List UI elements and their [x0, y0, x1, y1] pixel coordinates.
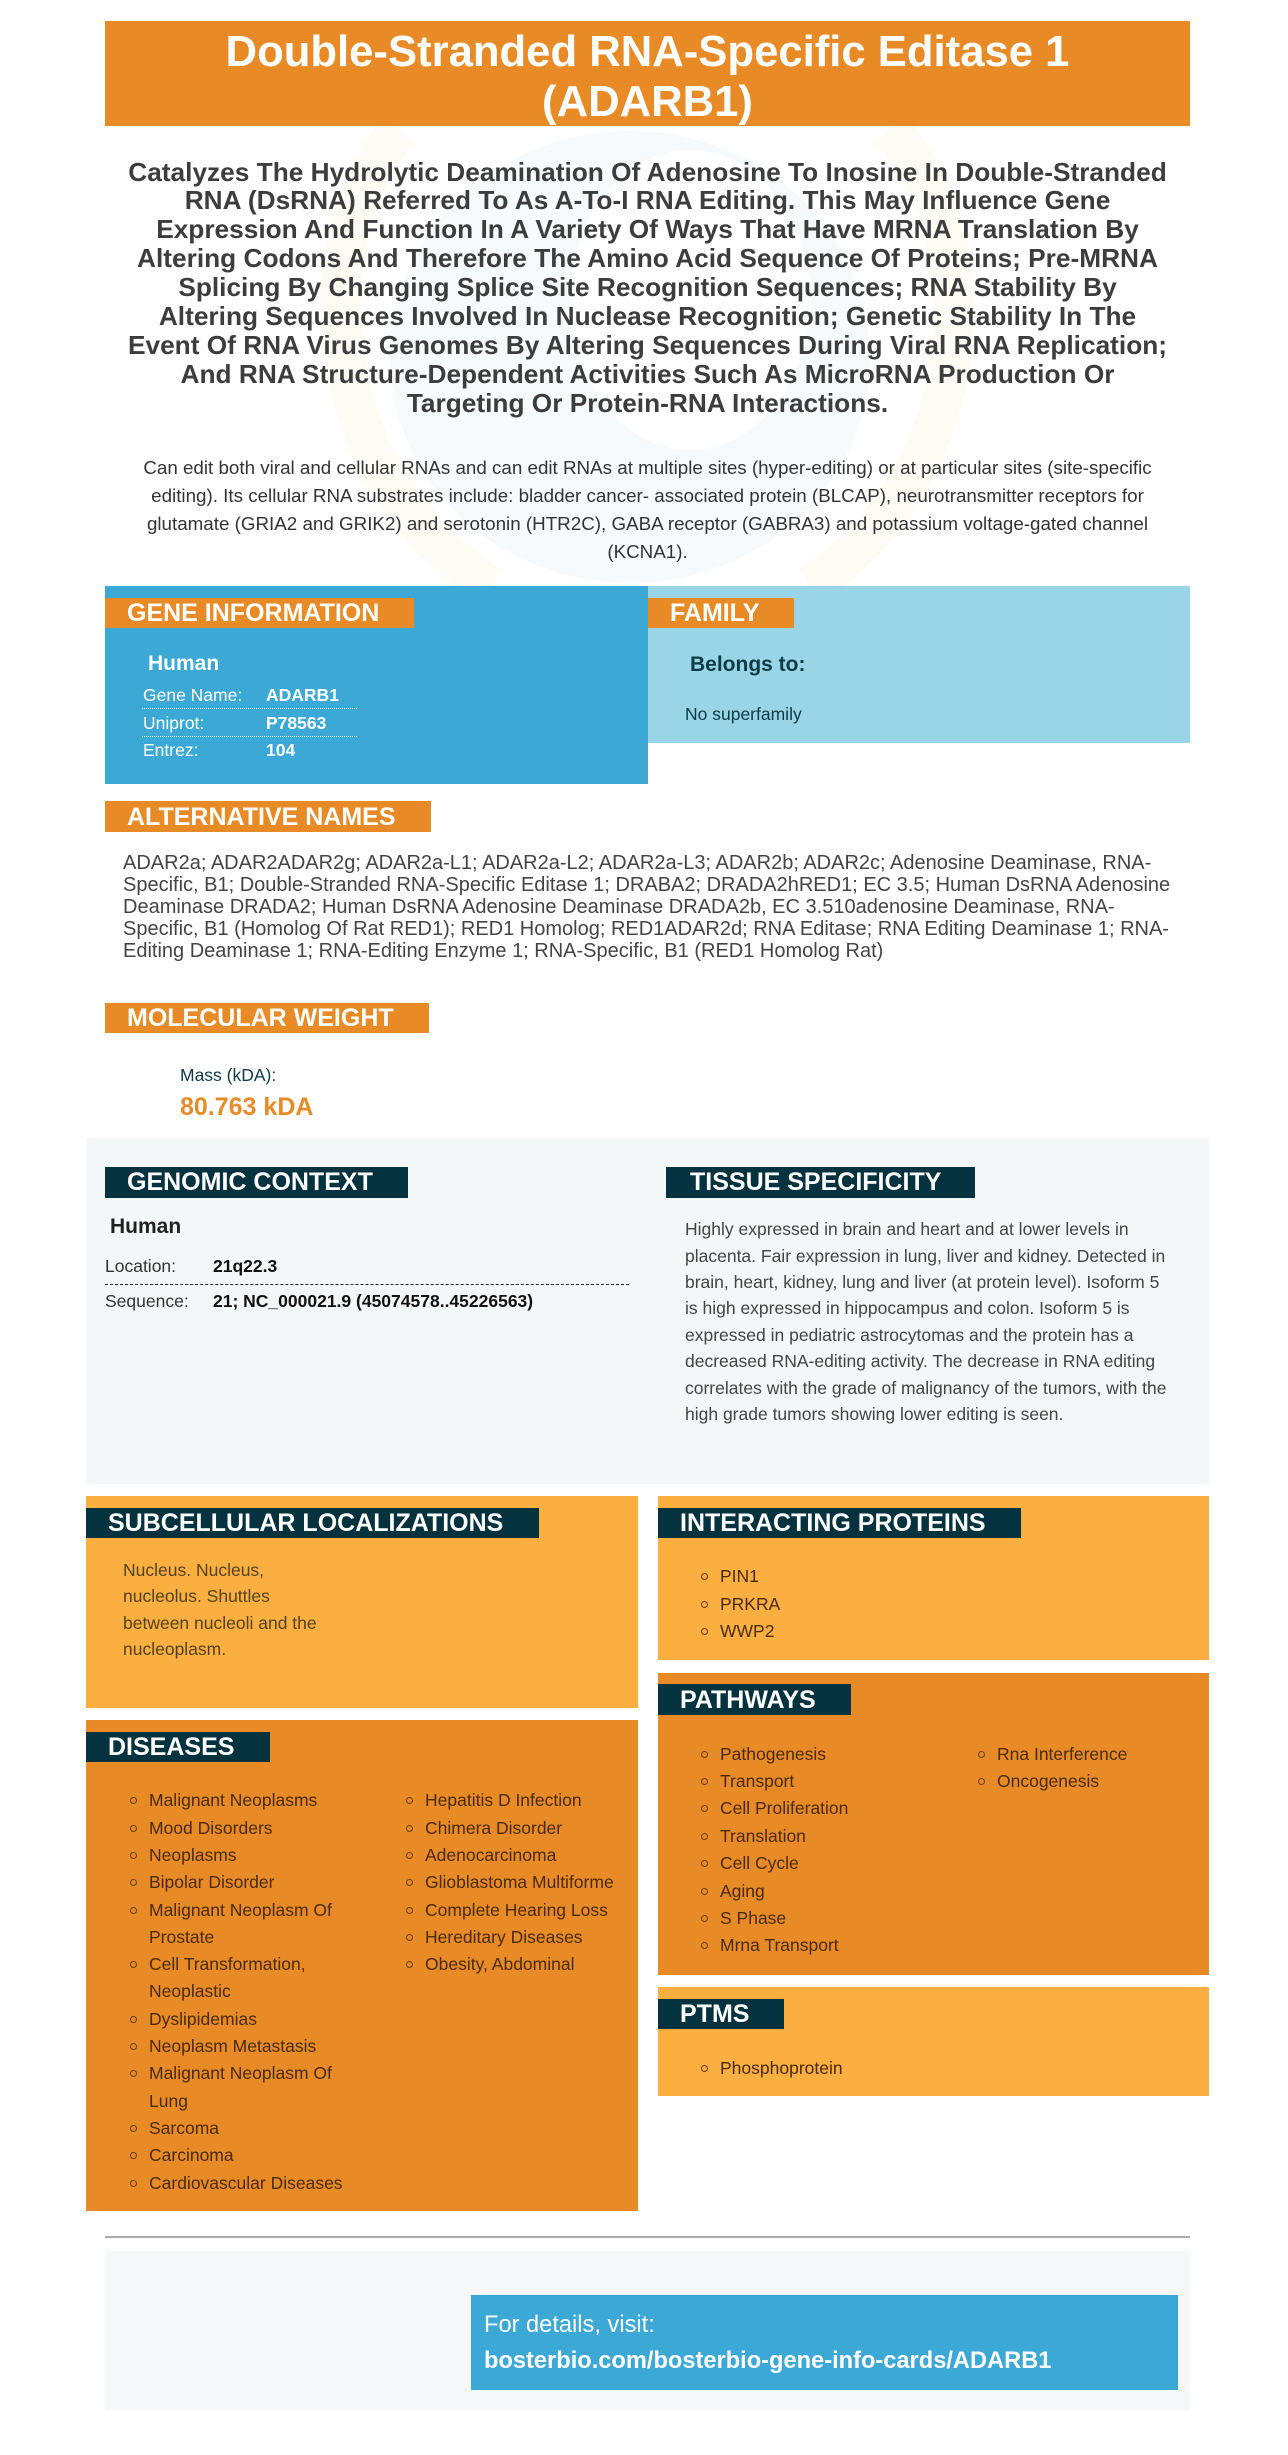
ptm list: Phosphoprotein [720, 2058, 843, 2078]
pathway list column 2: Oncogenesis [997, 1771, 1099, 1791]
disease list column 1: Dyslipidemias [149, 2009, 257, 2029]
callout label: For details, visit: [484, 2312, 655, 2338]
family value: No superfamily [685, 704, 802, 724]
description paragraph: editing). Its cellular RNA substrates include: bladder cancer- associated protein (BLCAP), neurotransmitter receptors for [151, 485, 1144, 506]
localization text: nucleoplasm. [123, 1639, 226, 1659]
callout: details link [471, 2295, 1178, 2390]
description heading: RNA (DsRNA) Referred To As A-To-I RNA Editing. This May Influence Gene [185, 185, 1110, 215]
description heading: Splicing By Changing Splice Site Recognition Sequences; RNA Stability By [178, 272, 1117, 302]
disease list column 2 [406, 1790, 614, 1974]
alternative names text: ADAR2a; ADAR2ADAR2g; ADAR2a-L1; ADAR2a-L2; ADAR2a-L3; ADAR2b; ADAR2c; Adenosine Deaminase, RNA- [123, 852, 1151, 874]
heading: interacting proteins: INTERACTING PROTEINS [680, 1509, 986, 1537]
heading: ptms [658, 1999, 784, 2029]
disease list column 2: Hereditary Diseases [425, 1927, 583, 1947]
callout url: bosterbio.com/bosterbio-gene-info-cards/ADARB1 [484, 2348, 1051, 2374]
heading: pathways: PATHWAYS [680, 1686, 816, 1714]
tissue specificity text: expressed in pediatric astrocytomas and the protein has a [685, 1325, 1133, 1345]
panel: subcellular localizations [86, 1496, 638, 1708]
tissue specificity text: decreased RNA-editing activity. The decrease in RNA editing [685, 1351, 1155, 1371]
heading: genomic context: GENOMIC CONTEXT [127, 1168, 373, 1196]
entrez row: 104 [266, 740, 295, 760]
pathway list column 1: Aging [720, 1881, 765, 1901]
panel: footer [105, 2251, 1190, 2410]
pathway list column 1: Cell Cycle [720, 1853, 799, 1873]
heading: family: FAMILY [670, 599, 759, 627]
location row: Location: [105, 1256, 176, 1276]
protein list [701, 1566, 780, 1641]
pathway list column 1: Transport [720, 1771, 794, 1791]
protein list: PRKRA [720, 1594, 780, 1614]
disease list column 1: Mood Disorders [149, 1818, 273, 1838]
heading: gene information: GENE INFORMATION [127, 599, 379, 627]
alternative names text: Specific, B1; Double-Stranded RNA-Specific Editase 1; DRABA2; DRADA2hRED1; EC 3.5; Human DsRNA Adenosine [123, 874, 1170, 896]
disease list column 2: Chimera Disorder [425, 1818, 562, 1838]
pathway list column 2 [978, 1744, 1127, 1791]
sequence row: 21; NC_000021.9 (45074578..45226563) [213, 1291, 533, 1311]
uniprot row: P78563 [266, 713, 326, 733]
description paragraph [143, 457, 1152, 562]
disease list column 1: Neoplasms [149, 1845, 237, 1865]
tissue specificity text: placenta. Fair expression in lung, liver and kidney. Detected in [685, 1246, 1165, 1266]
disease list column 1: Cardiovascular Diseases [149, 2173, 343, 2193]
tissue specificity text: high grade tumors showing lower editing is seen. [685, 1404, 1063, 1424]
heading: tissue specificity: TISSUE SPECIFICITY [690, 1168, 941, 1196]
panel: diseases [86, 1720, 638, 2211]
belongs to label: Belongs to: [690, 653, 806, 676]
protein list: WWP2 [720, 1621, 774, 1641]
disease list column 2: Hepatitis D Infection [425, 1790, 582, 1810]
localization text: between nucleoli and the [123, 1613, 317, 1633]
pathway list column 1: Translation [720, 1826, 806, 1846]
disease list column 1: Malignant Neoplasm Of [149, 2063, 332, 2083]
tissue specificity text [685, 1219, 1166, 1424]
heading: alternative names: ALTERNATIVE NAMES [127, 803, 396, 831]
disease list column 1: Malignant Neoplasm Of [149, 1900, 332, 1920]
tissue specificity text: is high expressed in hippocampus and colon. Isoform 5 is [685, 1298, 1130, 1318]
disease list column 2: Glioblastoma Multiforme [425, 1872, 614, 1892]
panel: family [648, 586, 1190, 743]
alternative names text: Editing Deaminase 1; RNA-Editing Enzyme 1; RNA-Specific, B1 (RED1 Homolog Rat) [123, 940, 883, 962]
gene name row: ADARB1 [266, 685, 339, 705]
location row: 21q22.3 [213, 1256, 277, 1276]
description paragraph: glutamate (GRIA2 and GRIK2) and serotonin (HTR2C), GABA receptor (GABRA3) and potassium voltage-gated channel [147, 513, 1148, 534]
description heading: Targeting Or Protein-RNA Interactions. [407, 388, 888, 418]
heading: diseases [86, 1732, 270, 1762]
tissue specificity text: brain, heart, kidney, lung and liver (at protein level). Isoform 5 [685, 1272, 1159, 1292]
pathway list column 2: Rna Interference [997, 1744, 1127, 1764]
species label: Human [148, 652, 219, 675]
description heading: Event Of RNA Virus Genomes By Altering Sequences During Viral RNA Replication; [128, 330, 1167, 360]
alternative names text [123, 852, 1170, 962]
heading: pathways [658, 1684, 851, 1715]
entrez row: Entrez: [143, 740, 198, 760]
title [105, 21, 1190, 126]
description heading [128, 156, 1167, 418]
protein list: PIN1 [720, 1566, 759, 1586]
pathway list column 1 [701, 1744, 848, 1955]
tissue specificity text: Highly expressed in brain and heart and at lower levels in [685, 1219, 1129, 1239]
background watermark logo [321, 126, 974, 586]
disease list column 1: Neoplasm Metastasis [149, 2036, 316, 2056]
description heading: Expression And Function In A Variety Of Ways That Have MRNA Translation By [156, 214, 1139, 244]
description heading: Catalyzes The Hydrolytic Deamination Of Adenosine To Inosine In Double-Stranded [128, 156, 1167, 186]
gene name row [142, 685, 357, 709]
pathway list column 1: Mrna Transport [720, 1935, 839, 1955]
sequence row: Sequence: [105, 1291, 189, 1311]
description paragraph: (KCNA1). [607, 541, 688, 562]
localization text: nucleolus. Shuttles [123, 1586, 270, 1606]
title: Double-Stranded RNA-Specific Editase 1 [226, 27, 1069, 76]
uniprot row: Uniprot: [143, 713, 204, 733]
heading: family [648, 598, 794, 628]
panel: ptms [658, 1987, 1209, 2096]
panel: pathways [658, 1673, 1209, 1975]
title: (ADARB1) [542, 77, 753, 126]
disease list column 1: Sarcoma [149, 2118, 219, 2138]
panel: interacting proteins [658, 1496, 1209, 1660]
description heading: And RNA Structure-Dependent Activities Such As MicroRNA Production Or [181, 359, 1114, 389]
mass value: 80.763 kDA [180, 1093, 313, 1121]
disease list column 1: Bipolar Disorder [149, 1872, 274, 1892]
mass label: Mass (kDA): [180, 1065, 276, 1085]
pathway list column 1: Pathogenesis [720, 1744, 826, 1764]
description heading: Altering Sequences Involved In Nuclease Recognition; Genetic Stability In The [159, 301, 1136, 331]
disease list column 1: Cell Transformation, [149, 1954, 306, 1974]
disease list column 1: Neoplastic [149, 1981, 231, 2001]
gene name row: Gene Name: [143, 685, 242, 705]
entrez row [143, 740, 296, 760]
localization text: Nucleus. Nucleus, [123, 1560, 264, 1580]
disease list column 1: Prostate [149, 1927, 214, 1947]
disease list column 2: Obesity, Abdominal [425, 1954, 574, 1974]
tissue specificity text: correlates with the grade of malignancy of the tumors, with the [685, 1378, 1166, 1398]
disease list column 1: Carcinoma [149, 2145, 234, 2165]
disease list column 1: Malignant Neoplasms [149, 1790, 317, 1810]
localization text [123, 1560, 317, 1659]
pathway list column 1: S Phase [720, 1908, 786, 1928]
disease list column 2: Complete Hearing Loss [425, 1900, 608, 1920]
heading: diseases: DISEASES [108, 1733, 234, 1761]
alternative names text: Specific, B1 (Homolog Of Rat RED1); RED1 Homolog; RED1ADAR2d; RNA Editase; RNA Editing Deaminase 1; RNA- [123, 918, 1169, 940]
heading: subcellular localizations: SUBCELLULAR LOCALIZATIONS [108, 1509, 503, 1537]
location row [105, 1256, 629, 1285]
disease list column 2: Adenocarcinoma [425, 1845, 556, 1865]
description paragraph: Can edit both viral and cellular RNAs and can edit RNAs at multiple sites (hyper-editing) or at particular sites (site-specific [143, 457, 1152, 478]
pathway list column 1: Cell Proliferation [720, 1798, 848, 1818]
heading: ptms: PTMS [680, 2000, 749, 2028]
alternative names text: Deaminase DRADA2; Human DsRNA Adenosine Deaminase DRADA2b, EC 3.510adenosine Deaminase, RNA- [123, 896, 1115, 918]
heading: molecular weight: MOLECULAR WEIGHT [127, 1004, 394, 1032]
species label: Human [110, 1215, 181, 1238]
panel: genomic context and tissue specificity [86, 1138, 1209, 1484]
disease list column 1 [130, 1790, 343, 2193]
disease list column 1: Lung [149, 2091, 188, 2111]
description heading: Altering Codons And Therefore The Amino Acid Sequence Of Proteins; Pre-MRNA [137, 243, 1158, 273]
panel: gene information [105, 586, 648, 784]
uniprot row [142, 713, 357, 737]
